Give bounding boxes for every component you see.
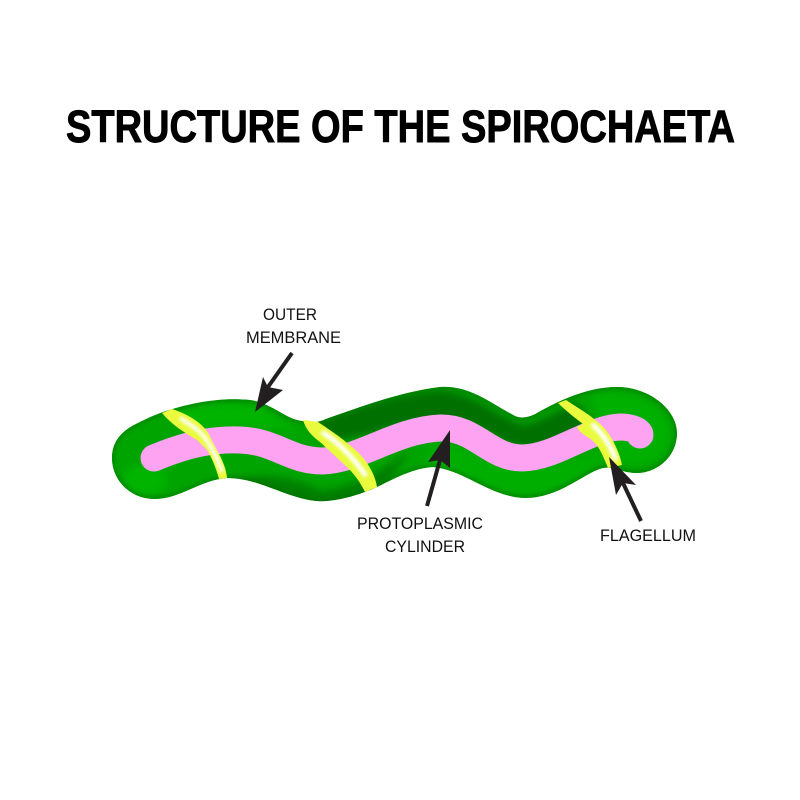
label: outer membrane: OUTER — [263, 305, 317, 324]
label: protoplasmic cylinder: PROTOPLASMIC — [357, 514, 483, 533]
arrow: protoplasmic cylinder — [427, 430, 450, 506]
label: protoplasmic cylinder: CYLINDER — [385, 537, 465, 556]
flagellum 1 — [162, 409, 227, 479]
outer membrane — [112, 386, 677, 502]
label: outer membrane: MEMBRANE — [246, 328, 341, 347]
flagellum 3 — [558, 400, 622, 468]
arrow: flagellum — [609, 457, 641, 521]
spirochaeta body — [112, 386, 677, 502]
arrow: outer membrane — [255, 353, 292, 412]
flagellum 2 — [303, 420, 377, 492]
protoplasmic cylinder — [154, 427, 640, 461]
label: flagellum: FLAGELLUM — [600, 526, 696, 545]
